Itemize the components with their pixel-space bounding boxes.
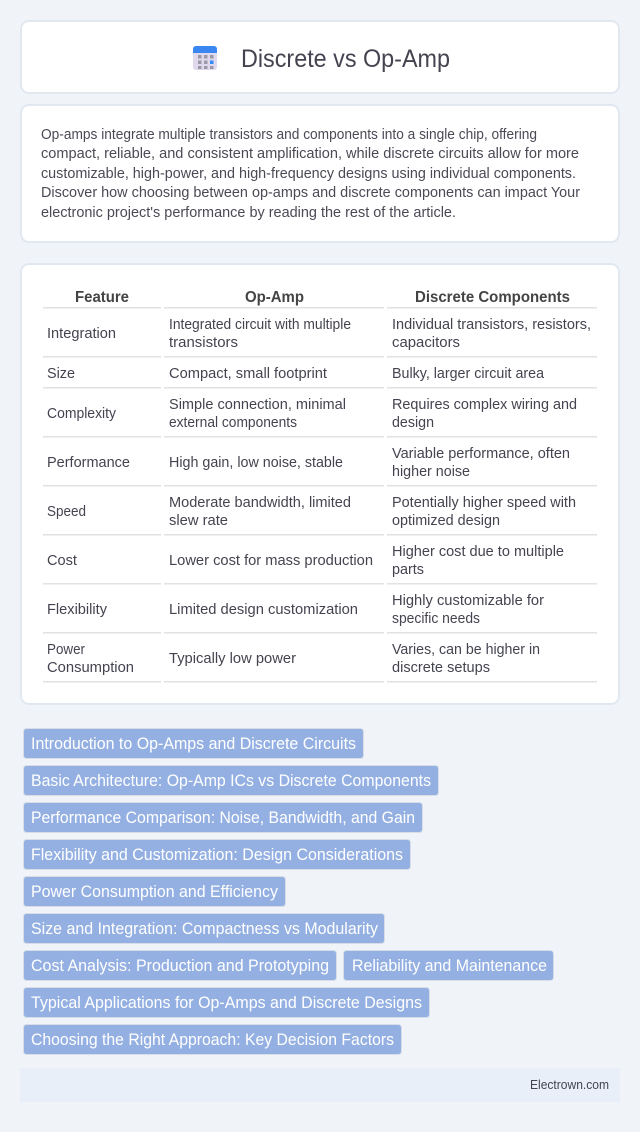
row: Power Consumption: Power xyxy=(47,642,85,658)
tag: cost: Cost Analysis: Production and Prototyping xyxy=(31,957,329,975)
row: Performance: High gain, low noise, stable xyxy=(169,455,343,471)
row: Flexibility: Limited design customization xyxy=(169,602,358,618)
header panel xyxy=(21,21,619,93)
row: Complexity: Simple connection, minimal xyxy=(169,397,346,413)
row: Power Consumption: discrete setups xyxy=(392,660,490,676)
row: Integration xyxy=(47,317,591,351)
row: Performance xyxy=(47,446,570,480)
row: Speed: Moderate bandwidth, limited xyxy=(169,495,351,511)
tag: architecture: Basic Architecture: Op-Amp ICs vs Discrete Components xyxy=(31,772,431,790)
row: Flexibility: Flexibility xyxy=(47,602,108,618)
tag: decision factors: Choosing the Right Approach: Key Decision Factors xyxy=(31,1031,394,1049)
row: Cost xyxy=(47,544,564,578)
row: Integration: Integrated circuit with multiple xyxy=(169,317,351,333)
row: Speed: Speed xyxy=(47,504,86,520)
table header row xyxy=(75,289,570,306)
tag: reliability: Reliability and Maintenance xyxy=(352,957,547,975)
row: Size xyxy=(47,366,545,382)
intro paragraph: electronic project's performance by reading the rest of the article. xyxy=(41,205,456,221)
row: Complexity xyxy=(47,397,577,431)
row: Performance: higher noise xyxy=(392,464,470,480)
table header row: Op-Amp xyxy=(245,289,304,306)
panel: comparison table xyxy=(21,264,619,704)
tag: architecture xyxy=(24,766,438,796)
row: Complexity: Complexity xyxy=(47,406,117,422)
row: Complexity: external components xyxy=(169,415,297,431)
tag: decision factors xyxy=(24,1024,402,1054)
row: Complexity: Requires complex wiring and xyxy=(392,397,577,413)
icon: calendar grid xyxy=(193,46,217,70)
tag: applications xyxy=(24,988,430,1018)
row: Power Consumption: Consumption xyxy=(47,660,134,676)
row: Flexibility: specific needs xyxy=(392,611,480,627)
tag: flexibility: Flexibility and Customization: Design Considerations xyxy=(31,846,403,864)
table header row: Feature xyxy=(75,289,129,306)
row: Power Consumption: Typically low power xyxy=(169,651,296,667)
tag list: article sections xyxy=(24,728,554,1054)
tag: power xyxy=(24,876,286,906)
row: Speed: Potentially higher speed with xyxy=(392,495,576,511)
panel: intro text xyxy=(21,105,619,242)
row: Cost: Lower cost for mass production xyxy=(169,553,373,569)
tag: size: Size and Integration: Compactness vs Modularity xyxy=(31,920,379,938)
tag: power: Power Consumption and Efficiency xyxy=(31,883,279,901)
row: Speed: slew rate xyxy=(169,513,228,529)
row: Cost: Higher cost due to multiple xyxy=(392,544,564,560)
intro paragraph: customizable, high-power, and high-frequency designs using individual components. xyxy=(41,166,576,182)
row: Flexibility: Highly customizable for xyxy=(392,593,544,609)
row: Power Consumption xyxy=(47,642,540,676)
tag: flexibility xyxy=(24,840,410,870)
row: Power Consumption: Varies, can be higher in xyxy=(392,642,540,658)
row: Performance: Variable performance, often xyxy=(392,446,570,462)
row: Cost: Cost xyxy=(47,553,77,569)
row: Size: Bulky, larger circuit area xyxy=(392,366,545,382)
row: Cost: parts xyxy=(392,562,424,578)
tag: size xyxy=(24,914,384,944)
footer xyxy=(20,1068,620,1102)
tag: applications: Typical Applications for Op-Amps and Discrete Designs xyxy=(31,994,422,1012)
title: Discrete vs Op-Amp xyxy=(241,45,450,73)
row: Speed: optimized design xyxy=(392,513,500,529)
footer credit: Electrown.com xyxy=(530,1077,609,1092)
tag: performance xyxy=(24,802,422,832)
row: Size: Compact, small footprint xyxy=(169,366,327,382)
row: Integration: Individual transistors, resistors, xyxy=(392,317,591,333)
table header row: Discrete Components xyxy=(415,289,570,306)
row: Integration: transistors xyxy=(169,335,238,351)
row: Flexibility xyxy=(47,593,544,627)
intro paragraph xyxy=(41,127,580,221)
tag: introduction: Introduction to Op-Amps and Discrete Circuits xyxy=(31,735,356,753)
intro paragraph: Discover how choosing between op-amps and discrete components can impact Your xyxy=(41,185,580,201)
tag: reliability xyxy=(344,950,554,980)
row: Complexity: design xyxy=(392,415,434,431)
row: Integration: Integration xyxy=(47,326,116,342)
tag: cost xyxy=(24,950,336,980)
row: Integration: capacitors xyxy=(392,335,460,351)
row: Performance: Performance xyxy=(47,455,130,471)
tag: performance: Performance Comparison: Noise, Bandwidth, and Gain xyxy=(31,809,415,827)
intro paragraph: compact, reliable, and consistent amplification, while discrete circuits allow for more xyxy=(41,146,579,162)
tag: introduction xyxy=(24,728,364,758)
row: Speed xyxy=(47,495,576,529)
intro paragraph: Op-amps integrate multiple transistors and components into a single chip, offering xyxy=(41,127,537,143)
row: Size: Size xyxy=(47,366,75,382)
